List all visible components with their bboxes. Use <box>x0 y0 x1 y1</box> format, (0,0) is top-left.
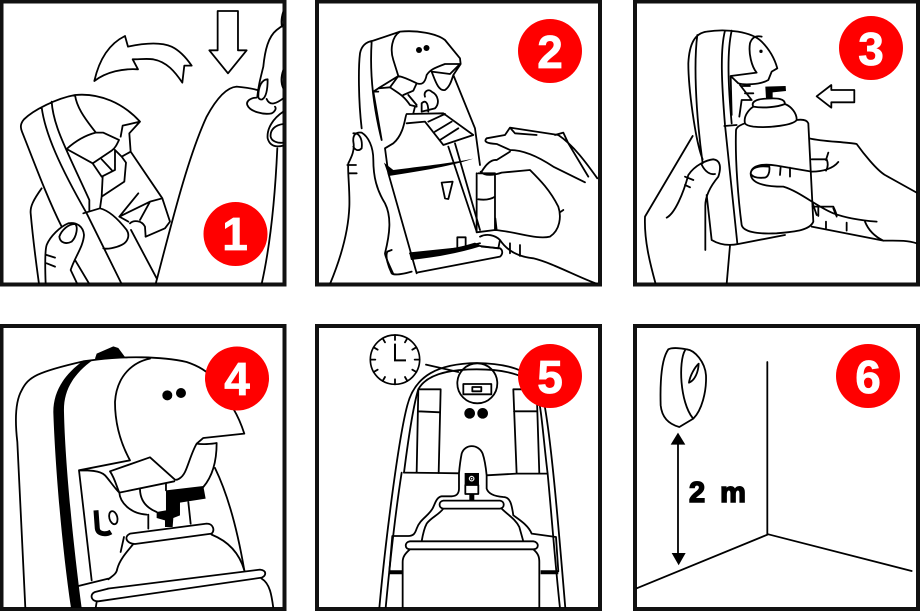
panel: step 5 set the timer <box>317 326 600 609</box>
step number 6 <box>836 344 900 408</box>
step number 6: 6 <box>855 351 881 403</box>
panel: step 1 open the cover <box>2 2 284 284</box>
panel: step 4 close-up of installed cartridge <box>2 326 284 609</box>
clock icon <box>370 335 420 384</box>
height arrow <box>671 433 686 565</box>
step number 5: 5 <box>537 351 563 403</box>
step number 3 <box>839 16 903 80</box>
lower fingers <box>480 235 597 284</box>
step number 2: 2 <box>537 26 563 78</box>
logo mark <box>96 510 119 534</box>
black bands <box>389 570 558 574</box>
arrow: curved opening <box>94 36 192 83</box>
fingers holding cartridge <box>477 128 597 237</box>
dispenser front housing <box>379 363 565 608</box>
room corner <box>637 362 912 588</box>
step number 3: 3 <box>858 23 884 75</box>
step number 4: 4 <box>224 353 250 405</box>
nozzle <box>157 486 206 527</box>
arrow: push down <box>209 11 247 73</box>
centre spout <box>389 446 558 571</box>
hand holding base <box>31 188 146 284</box>
inner door panels <box>404 389 548 474</box>
panel: step 2 insert cartridge <box>317 2 600 284</box>
dispenser side view <box>688 30 785 245</box>
step number 1: 1 <box>222 208 248 260</box>
step number 2 <box>518 19 582 83</box>
panel: step 6 mounting height <box>635 326 918 609</box>
arrow: push in <box>817 85 854 108</box>
cartridge <box>403 501 539 608</box>
step number 5 <box>518 344 582 408</box>
dispenser body <box>359 31 480 274</box>
black strap and knob <box>53 346 125 608</box>
height label: 2 m <box>689 477 749 509</box>
base lower edge <box>417 247 502 273</box>
black fold shadows <box>384 159 482 260</box>
cartridge <box>78 524 273 608</box>
right hand <box>751 138 917 243</box>
dispenser icon <box>661 348 706 427</box>
eyes: sensor dots <box>416 45 430 53</box>
timer circle and display <box>426 363 497 403</box>
step number 4 <box>205 346 269 410</box>
panel: step 3 push cartridge in <box>635 2 918 284</box>
dispenser housing <box>16 357 244 608</box>
holding hand <box>330 132 393 284</box>
cartridge <box>724 98 813 234</box>
dispenser cover <box>156 87 277 284</box>
left hand <box>645 136 730 284</box>
step number 1 <box>204 202 268 266</box>
opened dispenser base <box>21 95 170 284</box>
sensor dots <box>464 408 488 419</box>
sensor dots <box>162 388 186 400</box>
hand pressing release button <box>247 12 283 146</box>
cartridge nozzle <box>765 86 786 99</box>
